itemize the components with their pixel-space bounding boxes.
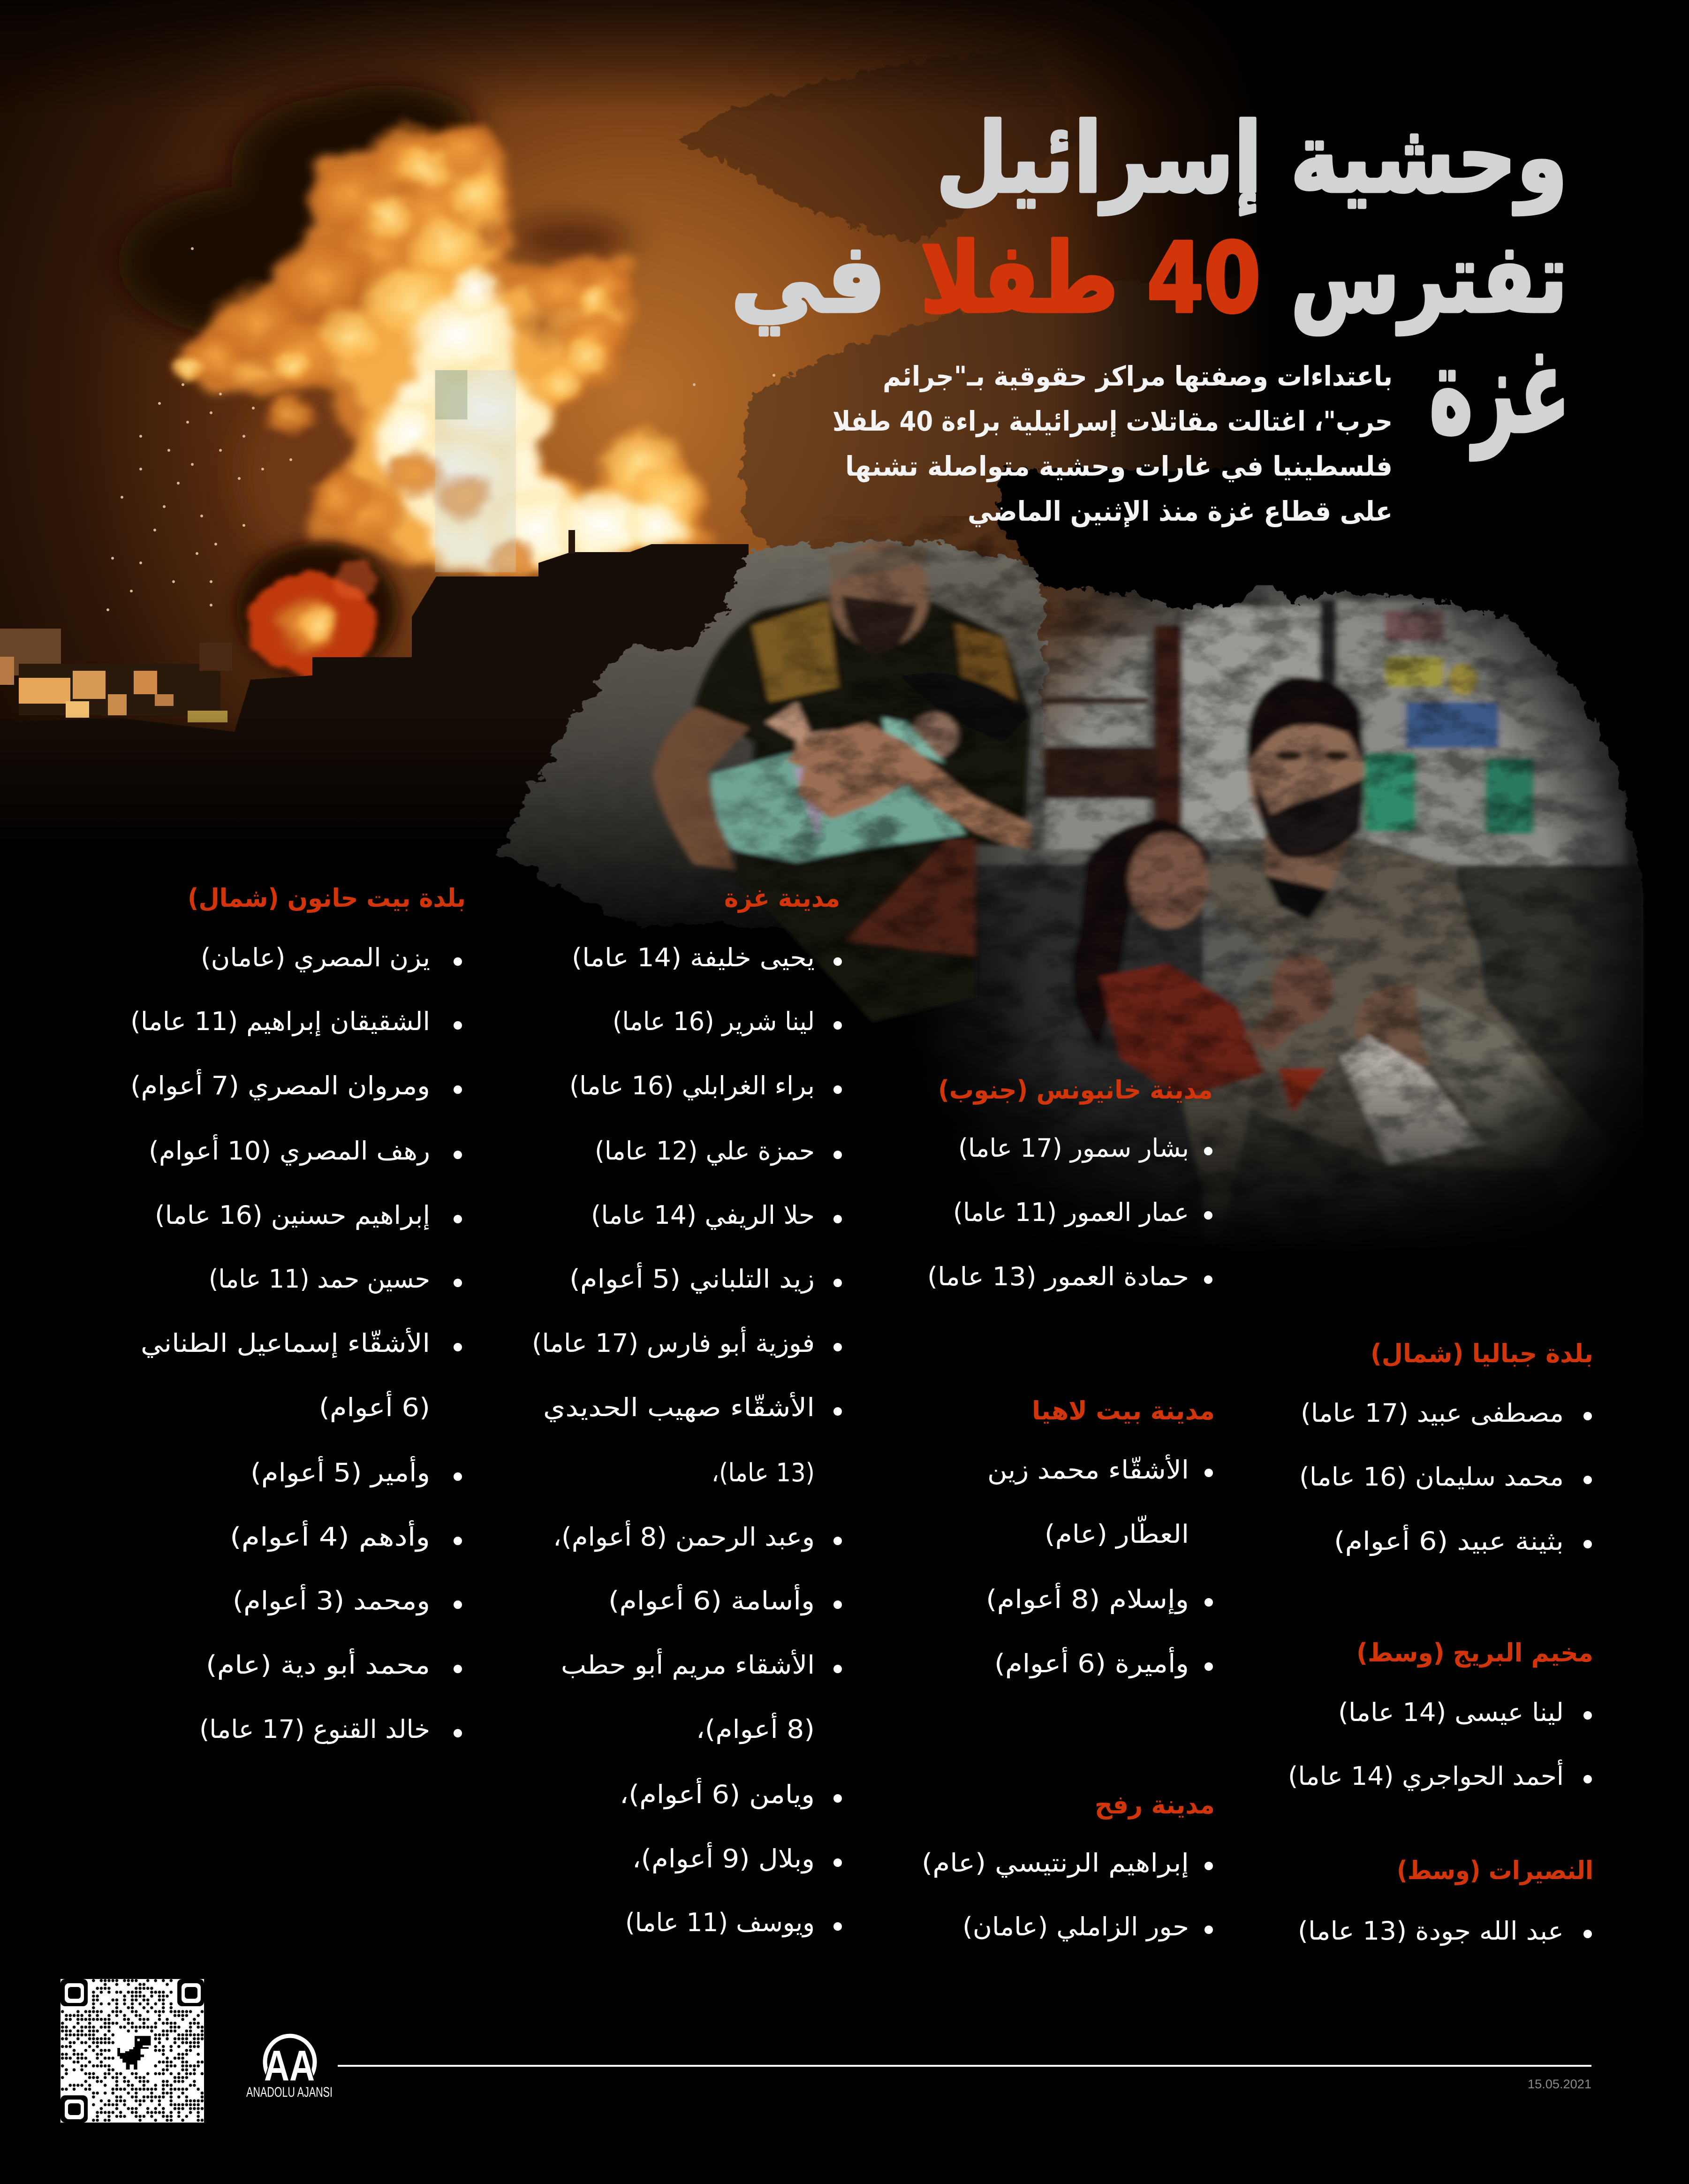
list: Nuseirat names: عبد الله جودة (13 عاما): [1298, 1916, 1564, 1946]
heading: Beit Hanoun: بلدة بيت حانون (شمال): [188, 883, 466, 913]
list: Beit Hanoun names: إبراهيم حسنين (16 عاما): [155, 1200, 430, 1230]
grey column artefact: [435, 370, 516, 572]
torn grey wall behind the figures: [501, 539, 1045, 926]
list: Gaza City names: ويوسف (11 عاما): [625, 1908, 815, 1937]
list: Beit Hanoun names: [130, 943, 462, 1744]
head: [830, 542, 929, 649]
torn black edge: [999, 469, 1689, 1126]
baby hair and face: [900, 673, 1031, 743]
bottom fade of the photos: [610, 1055, 1689, 1257]
left arm: [652, 707, 749, 870]
panel: Gaza City: [532, 883, 842, 1937]
photo: man carrying a baby: [652, 542, 1031, 1023]
title: في: [731, 223, 886, 335]
body: [1180, 834, 1589, 1176]
intro text: باعتداءات وصفتها مراكز حقوقية بـ"جرائم: [883, 360, 1393, 393]
fire cloud drawn in crop coordinates: [119, 85, 711, 678]
blanket: [711, 743, 965, 862]
heading: Gaza City: مدينة غزة: [724, 883, 840, 913]
fire body layers: [178, 128, 711, 572]
list: Gaza City names: وأسامة (6 أعوام): [608, 1584, 815, 1615]
panel: Nuseirat: [1298, 1856, 1593, 1946]
heading: Khan Younis: مدينة خانيونس (جنوب): [938, 1075, 1213, 1105]
list: Beit Lahia names: [986, 1454, 1213, 1678]
list: Gaza City names: الأشقّاء صهيب الحديدي: [543, 1392, 815, 1422]
building silhouettes: [0, 544, 749, 891]
title: وحشية إسرائيل: [936, 103, 1568, 215]
hands: [1272, 954, 1333, 1025]
list: Gaza City names: (13 عاما)،: [712, 1458, 815, 1487]
list: Beit Hanoun names: الأشقّاء إسماعيل الطناني: [141, 1327, 430, 1358]
list: Rafah names: حور الزاملي (عامان): [962, 1912, 1189, 1941]
baby arm and man's hand: [766, 702, 865, 758]
list: Gaza City names: براء الغرابلي (16 عاما): [569, 1071, 815, 1100]
panel: Rafah: [922, 1790, 1215, 1941]
list: Khan Younis names: عمار العمور (11 عاما): [953, 1198, 1189, 1227]
list: Gaza City names: زيد التلباني (5 أعوام): [569, 1262, 815, 1294]
date: 15.05.2021: [1528, 2077, 1591, 2091]
list: Gaza City names: يحيى خليفة (14 عاما): [572, 943, 815, 972]
list: Beit Hanoun names: ومروان المصري (7 أعوام): [130, 1069, 430, 1100]
girl: [1072, 819, 1210, 1048]
panel: Beit Lahia: [986, 1396, 1215, 1678]
photo: man holding injured girl: [943, 585, 1644, 1233]
dark smoke: [119, 85, 630, 339]
list: Beit Hanoun names: رهف المصري (10 أعوام): [149, 1134, 430, 1166]
list: Bureij names: [1288, 1698, 1592, 1791]
dim lit cloud under the fireball: [242, 397, 361, 550]
title: غزة: [1429, 323, 1570, 460]
icon: dinosaur: [116, 2034, 152, 2071]
heading: Rafah: مدينة رفح: [1095, 1790, 1215, 1820]
list: Beit Hanoun names: خالد القنوع (17 عاما): [199, 1714, 430, 1744]
list: Beit Hanoun names: وأمير (5 أعوام): [250, 1456, 430, 1487]
logo: Anadolu Ajansi: AA: [264, 2042, 315, 2090]
low explosion: [237, 543, 399, 678]
list: Gaza City names: وبلال (9 أعوام)،: [632, 1842, 815, 1873]
list: Bureij names: أحمد الحواجري (14 عاما): [1288, 1759, 1564, 1791]
heading: Beit Lahia: مدينة بيت لاهيا: [1032, 1396, 1215, 1426]
list: Beit Hanoun names: الشقيقان إبراهيم (11 عاما): [130, 1007, 430, 1036]
list: Gaza City names: الأشقاء مريم أبو حطب: [561, 1648, 815, 1680]
panel: Bureij camp: [1288, 1638, 1593, 1791]
panel: Jabalia: [1299, 1339, 1593, 1556]
torn dark paper texture near title: [675, 47, 1313, 610]
list: Beit Hanoun names: يزن المصري (عامان): [201, 943, 430, 972]
list: Rafah names: [922, 1848, 1213, 1941]
intro text: حرب"، اغتالت مقاتلات إسرائيلية براءة 40 طفلا: [833, 405, 1393, 438]
list: Gaza City names: حمزة علي (12 عاما): [595, 1136, 815, 1166]
title: [731, 103, 1570, 460]
list: Jabalia names: بثينة عبيد (6 أعوام): [1334, 1524, 1564, 1556]
fade to black: [0, 713, 797, 854]
heading: Bureij camp: مخيم البريج (وسط): [1356, 1638, 1593, 1668]
list: Gaza City names: (8 أعوام)،: [696, 1713, 815, 1744]
list: Gaza City names: لينا شرير (16 عاما): [613, 1007, 815, 1036]
list: Beit Lahia names: وإسلام (8 أعوام): [986, 1583, 1189, 1614]
list: Jabalia names: [1299, 1398, 1592, 1556]
list: Gaza City names: ويامن (6 أعوام)،: [620, 1778, 815, 1809]
list: Beit Hanoun names: حسين حمد (11 عاما): [209, 1264, 430, 1294]
list: Gaza City names: فوزية أبو فارس (17 عاما): [532, 1327, 815, 1358]
QR code: [61, 1979, 204, 2123]
list: Khan Younis names: حمادة العمور (13 عاما): [927, 1262, 1189, 1291]
list: Beit Lahia names: العطّار (عام): [1045, 1515, 1189, 1549]
list: Beit Hanoun names: محمد أبو دية (عام): [206, 1648, 430, 1680]
list: Beit Lahia names: الأشقّاء محمد زين: [987, 1454, 1189, 1485]
list: Khan Younis names: بشار سمور (17 عاما): [958, 1133, 1189, 1163]
shirt: [694, 595, 1031, 1023]
QR finder marks: [61, 1979, 204, 2123]
list: Jabalia names: محمد سليمان (16 عاما): [1299, 1462, 1564, 1492]
sparks: [108, 249, 774, 610]
intro text: فلسطينيا في غارات وحشية متواصلة تشنها: [845, 450, 1393, 483]
wall posters: [1364, 753, 1416, 832]
list: Beit Hanoun names: (6 أعوام): [319, 1391, 430, 1422]
list: Beit Hanoun names: ومحمد (3 أعوام): [233, 1584, 430, 1615]
list: Rafah names: إبراهيم الرنتيسي (عام): [922, 1848, 1189, 1878]
grunge overlay: [657, 516, 1689, 1360]
heading: Jabalia: بلدة جباليا (شمال): [1371, 1339, 1593, 1368]
list: Khan Younis names: [927, 1133, 1212, 1291]
title: تفترس: [1291, 223, 1568, 335]
intro text: على قطاع غزة منذ الإثنين الماضي: [968, 495, 1393, 528]
footer rule: [338, 2065, 1591, 2067]
list: Beit Lahia names: وأميرة (6 أعوام): [994, 1647, 1189, 1678]
list: Gaza City names: حلا الريفي (14 عاما): [591, 1200, 815, 1230]
list: Beit Hanoun names: وأدهم (4 أعوام): [230, 1520, 430, 1552]
logo: Anadolu Ajansi: [246, 2036, 333, 2100]
heading: Nuseirat: النصيرات (وسط): [1397, 1856, 1593, 1885]
logo: Anadolu Ajansi: ANADOLU AJANSI: [246, 2085, 333, 2100]
window and door: [1045, 636, 1148, 745]
panel: Khan Younis: [927, 1075, 1213, 1291]
photo: explosion over Gaza: [0, 0, 1689, 948]
head: [1248, 682, 1364, 855]
title: 40 طفلا: [920, 223, 1261, 334]
intro text: [833, 360, 1393, 528]
list: Bureij names: لينا عيسى (14 عاما): [1338, 1698, 1564, 1727]
panel: Beit Hanoun: [130, 883, 466, 1744]
lit town on the left: [0, 629, 232, 722]
list: Gaza City names: وعبد الرحمن (8 أعوام)،: [553, 1520, 815, 1552]
list: Gaza City names: [532, 943, 842, 1937]
list: Jabalia names: مصطفى عبيد (17 عاما): [1301, 1398, 1564, 1428]
fireball puffs: [170, 118, 711, 581]
white cloth and blanket: [1217, 1109, 1595, 1251]
